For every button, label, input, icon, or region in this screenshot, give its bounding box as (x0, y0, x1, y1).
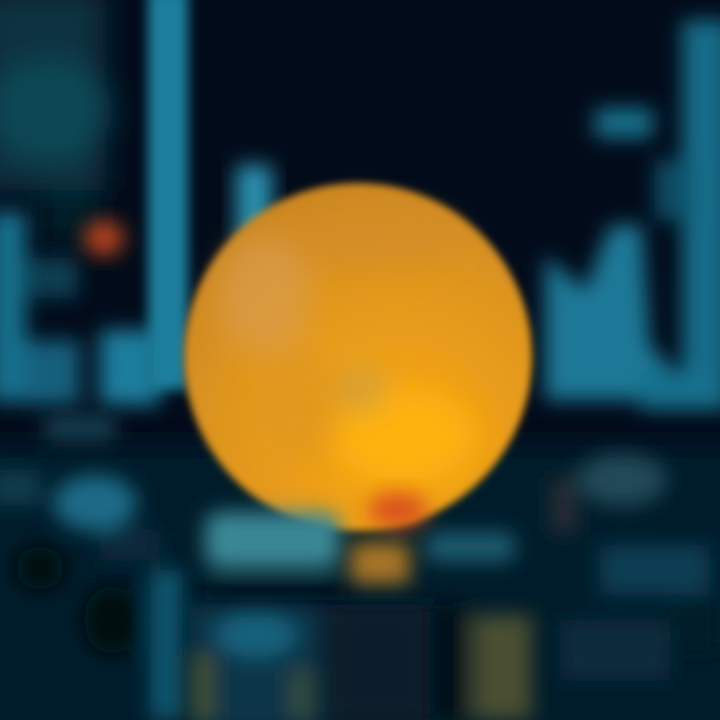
orb surface details (220, 210, 475, 480)
red beacon (84, 220, 124, 256)
orange stem (350, 542, 410, 584)
tall teal column (148, 0, 188, 390)
left teal skyline (0, 212, 160, 405)
left street shapes (0, 415, 182, 720)
right teal skyline (545, 20, 720, 410)
lower street base (0, 445, 720, 720)
red flame at orb base (368, 492, 428, 528)
left dark teal tower (0, 0, 112, 240)
central pedestal teal slab (205, 512, 515, 600)
right street shapes (552, 454, 720, 680)
small teal tower behind orb (236, 165, 272, 240)
glowing orange orb (184, 183, 532, 531)
foreground reflections (190, 605, 532, 720)
